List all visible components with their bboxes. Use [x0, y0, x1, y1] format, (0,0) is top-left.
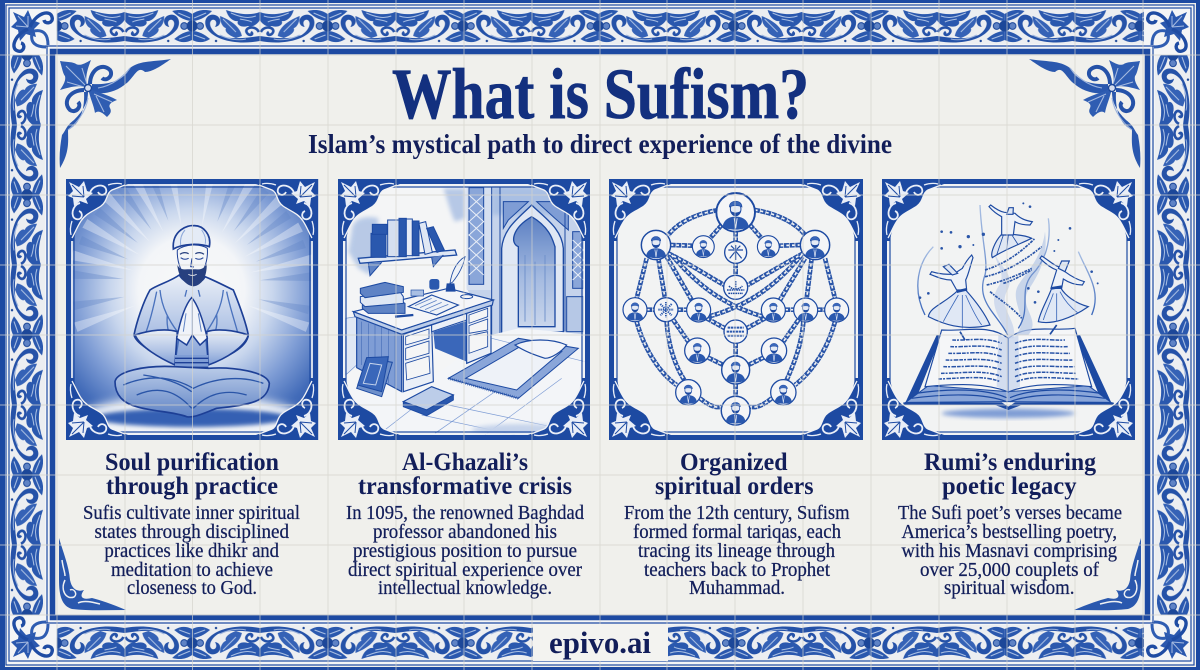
text block: spiritual orders: tracing its lineage through: [638, 541, 835, 562]
text block: soul purification: through practice: [106, 473, 278, 500]
text block: spiritual orders: teachers back to Prophet: [644, 560, 831, 581]
text block: Rumi: [898, 449, 1122, 599]
text block: soul purification: meditation to achieve: [111, 560, 273, 581]
footer brand: epivo.ai: [549, 625, 651, 660]
text block: Al-Ghazali: In 1095, the renowned Baghdad: [346, 503, 584, 524]
text block: Al-Ghazali: direct spiritual experience over: [348, 560, 582, 581]
illustration: lineage network: [623, 193, 849, 425]
panel: Rumi book and dervishes: [882, 179, 1135, 440]
decorative frame: [338, 179, 590, 440]
text block: spiritual orders: spiritual orders: [655, 473, 814, 500]
medallions: [623, 193, 849, 425]
subtitle: Islam’s mystical path to direct experience of the divine: [308, 129, 892, 159]
illustration: meditating figure: [66, 163, 318, 445]
dervish: right: [1038, 256, 1088, 334]
text block: Rumi: Rumi’s enduring: [924, 449, 1096, 476]
text block: Rumi: America’s bestselling poetry,: [902, 522, 1117, 543]
corner ornament: top left: [60, 59, 171, 168]
text block: Rumi: with his Masnavi comprising: [902, 541, 1117, 562]
corner ornament: top right: [1029, 59, 1140, 168]
title: What is Sufism?: [392, 54, 809, 134]
decorative frame: [882, 179, 1135, 440]
text block: Rumi: spiritual wisdom.: [944, 578, 1074, 599]
corner ornament: bottom left: [59, 538, 126, 610]
text block: Rumi: poetic legacy: [942, 473, 1077, 500]
illustration: whirling dervishes over book: [903, 202, 1115, 418]
text block: spiritual orders: Muhammad.: [689, 578, 785, 599]
text block: soul purification: practices like dhikr and: [104, 541, 279, 562]
text block: Rumi: over 25,000 couplets of: [920, 560, 1099, 581]
text block: Al-Ghazali: intellectual knowledge.: [378, 578, 552, 599]
text block: Rumi: The Sufi poet’s verses became: [898, 503, 1122, 524]
text block: soul purification: Soul purification: [105, 449, 279, 476]
text block: soul purification: closeness to God.: [127, 578, 257, 599]
decorative frame: [609, 179, 863, 440]
text block: soul purification: [83, 449, 301, 599]
text block: spiritual orders: formed formal tariqas, each: [633, 522, 841, 543]
text block: soul purification: states through disciplined: [94, 522, 289, 543]
text block: Al-Ghazali: Al-Ghazali’s: [402, 449, 528, 476]
chains: [637, 210, 835, 407]
illustration: study room: [338, 179, 590, 440]
text block: spiritual orders: [624, 449, 850, 599]
text block: spiritual orders: From the 12th century, Sufism: [624, 503, 850, 524]
dervish: left: [928, 255, 990, 340]
text block: Al-Ghazali: prestigious position to pursue: [353, 541, 577, 562]
dervish: top: [989, 205, 1032, 258]
text block: Al-Ghazali: transformative crisis: [358, 473, 572, 500]
corner ornament: bottom right: [1074, 538, 1141, 610]
panel: soul purification: [66, 163, 318, 445]
panel: spiritual orders chain: [609, 179, 863, 440]
decorative frame: [66, 179, 318, 440]
panel: Al-Ghazali study: [338, 179, 590, 440]
text block: Al-Ghazali: professor abandoned his: [373, 522, 557, 543]
text block: spiritual orders: Organized: [680, 449, 788, 476]
text block: soul purification: Sufis cultivate inner spiritual: [83, 503, 301, 524]
text block: Al-Ghazali: [346, 449, 584, 599]
